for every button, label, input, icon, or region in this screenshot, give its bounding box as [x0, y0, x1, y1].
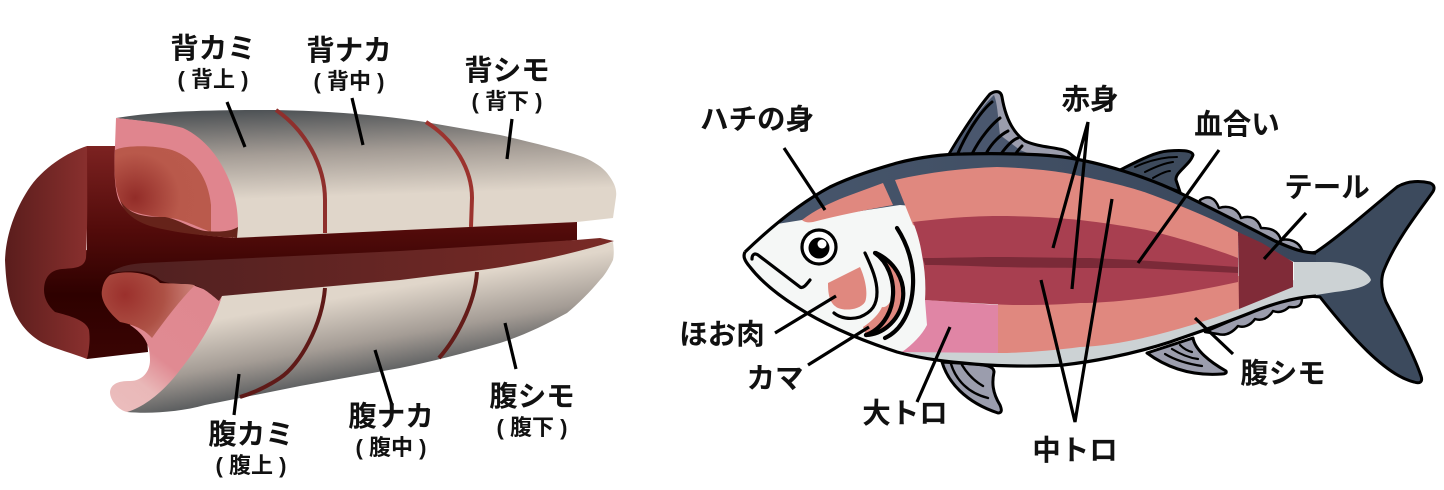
flesh: lower chutoro: [998, 276, 1239, 353]
cheek meat: [828, 267, 866, 310]
label: 腹シモ: ( 腹下 ): [497, 415, 567, 440]
mouth: [752, 254, 810, 288]
label: 腹ナカ: 腹ナカ: [348, 401, 434, 433]
back stripe: [777, 154, 1316, 263]
upper inner flesh: [115, 146, 211, 232]
upper pink cut face: [114, 118, 238, 238]
label: 背シモ: [464, 55, 550, 114]
upper tube surface: [116, 110, 616, 238]
lower pink cut face: [110, 284, 222, 412]
lower cut band: [110, 238, 614, 301]
label: 腹シモ: 腹シモ: [1240, 358, 1326, 390]
label: 背ナカ: ( 背中 ): [314, 69, 384, 94]
section lines: [240, 110, 477, 397]
flesh: otoro: [902, 300, 998, 353]
label: 腹シモ: [489, 381, 575, 440]
anal fin: [1147, 338, 1226, 374]
tail meat: [1238, 232, 1293, 309]
dorsal fin: [948, 92, 1078, 160]
label: 背カミ: [170, 33, 256, 92]
right diagram: whole tuna: [744, 92, 1434, 422]
eye: [802, 230, 836, 264]
label: 腹カミ: 腹カミ: [208, 419, 294, 451]
label: 腹カミ: ( 腹上 ): [216, 453, 286, 478]
kama pink: [863, 254, 903, 335]
label: 腹カミ: [208, 419, 294, 478]
upper finlets: [1200, 197, 1302, 250]
label: 背ナカ: [306, 35, 392, 94]
flesh: upper chutoro: [895, 167, 1238, 262]
lower finlets: [1205, 295, 1302, 335]
belly: [902, 262, 1371, 366]
label: 背シモ: 背シモ: [464, 55, 550, 87]
second dorsal fin: [1120, 150, 1193, 192]
dark red end cap: [5, 146, 90, 359]
gill lines: [834, 228, 913, 338]
label: ほお肉: ほお肉: [679, 319, 765, 351]
label: 背カミ: 背カミ: [170, 33, 256, 65]
label: 腹ナカ: ( 腹中 ): [356, 435, 426, 460]
leader lines: [775, 122, 1306, 422]
flesh: bloodline: [923, 257, 1238, 273]
label: ハチの身: ハチの身: [700, 104, 814, 136]
label: 血合い: 血合い: [1194, 109, 1280, 141]
hachinomi: [802, 183, 893, 222]
label: テール: テール: [1284, 172, 1370, 204]
label: 赤身: 赤身: [1061, 84, 1119, 116]
dark red inner core: [40, 146, 577, 359]
label: カマ: カマ: [746, 363, 804, 395]
label: 背シモ: ( 背下 ): [472, 89, 542, 114]
label: 腹ナカ: [348, 401, 434, 460]
body outline: [744, 154, 1316, 366]
lower inner flesh: [102, 272, 195, 338]
upper brown edge: [120, 200, 238, 238]
label: 腹シモ: 腹シモ: [489, 381, 575, 413]
label: 大トロ: 大トロ: [862, 398, 948, 430]
tail fin: [1290, 182, 1434, 383]
leader lines: [227, 98, 516, 415]
label: 背ナカ: 背ナカ: [306, 35, 392, 67]
body outline fill: [744, 154, 1316, 366]
label: 背カミ: ( 背上 ): [178, 67, 248, 92]
pectoral ventral fin: [942, 362, 1001, 413]
label: 中トロ: 中トロ: [1032, 435, 1118, 467]
flesh: akami band: [913, 216, 1238, 305]
left diagram: tuna loin section: [5, 98, 616, 415]
lower tube surface: [127, 242, 614, 413]
